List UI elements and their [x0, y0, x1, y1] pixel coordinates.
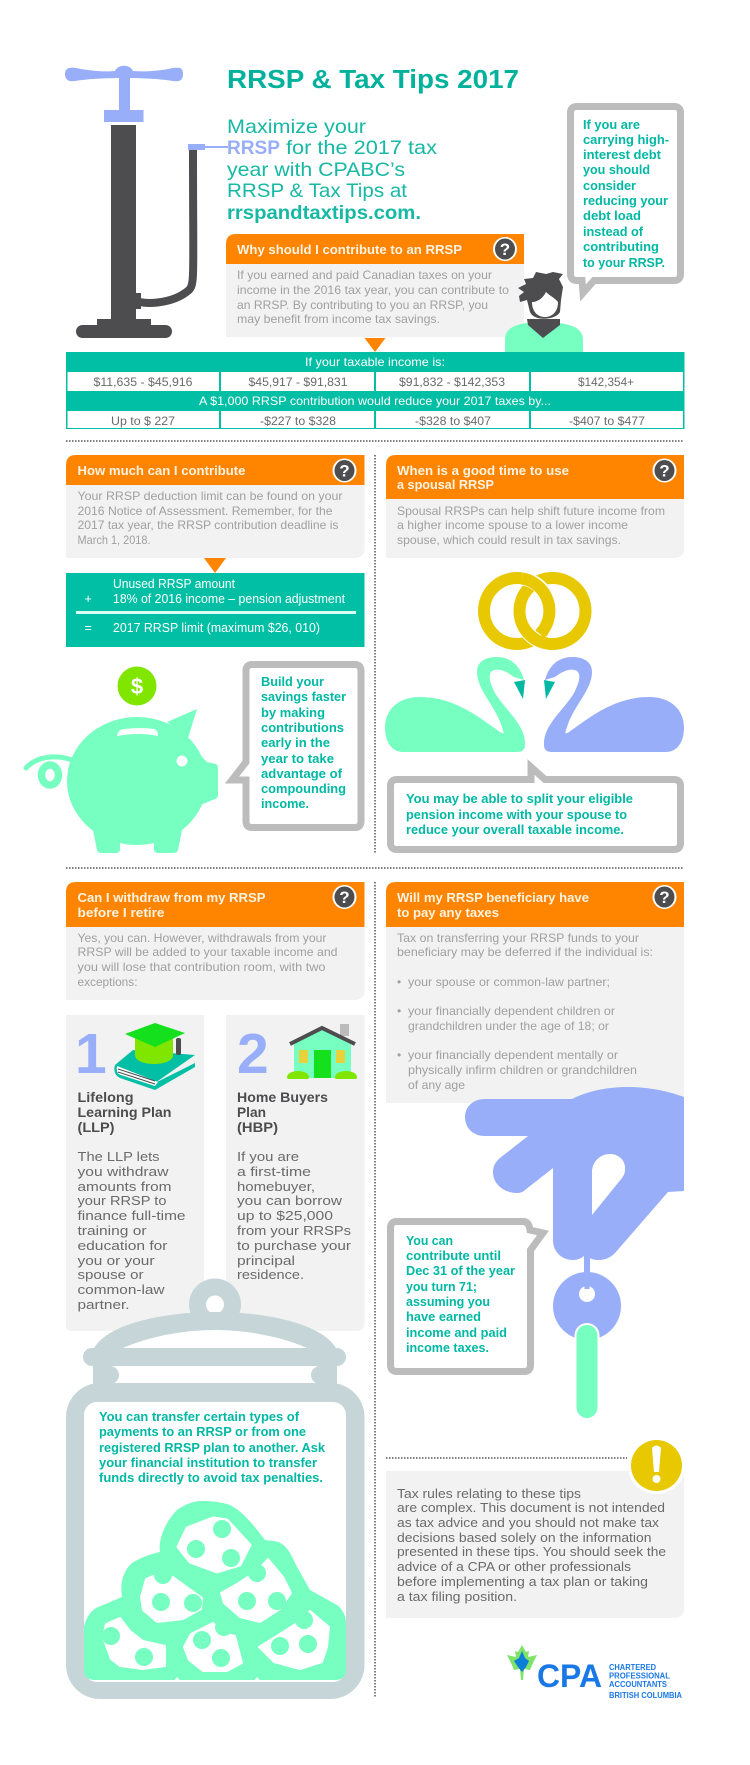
- speech bubble: contribute until: income and paid: [406, 1326, 507, 1340]
- table: income and tax reduction: -$227 to $328: [260, 414, 336, 428]
- panel: disclaimer: as tax advice and you should not make tax: [397, 1516, 660, 1530]
- title: RRSP & Tax Tips 2017: [227, 66, 519, 94]
- text: HBP description: homebuyer,: [237, 1179, 315, 1194]
- speech bubble: build savings: compounding: [261, 782, 346, 796]
- speech bubble: contribute until: [390, 1222, 543, 1372]
- speech bubble: split pension income: You may be able to split your eligible: [406, 792, 633, 806]
- icon: dollar coin: $: [131, 674, 143, 699]
- speech bubble: build savings: advantage of: [261, 767, 343, 781]
- speech bubble: build savings: [232, 664, 361, 828]
- speech bubble: split pension income: reduce your overall taxable income.: [406, 823, 624, 837]
- speech bubble: debt: If you are: [583, 118, 640, 132]
- intro text: Maximize your: [227, 116, 367, 138]
- speech bubble: debt: reducing your: [583, 194, 668, 208]
- text: HBP description: up to $25,000: [237, 1208, 333, 1223]
- speech bubble: debt: you should: [583, 163, 650, 177]
- heading: LLP: [78, 1089, 172, 1135]
- panel: why should I contribute: ?: [500, 240, 510, 259]
- icon: graduation cap on book: [114, 1023, 195, 1090]
- text: LLP description: education for: [78, 1238, 168, 1253]
- heading: LLP: Learning Plan: [78, 1104, 172, 1120]
- panel: beneficiary taxes: physically infirm children or grandchildren: [408, 1063, 637, 1077]
- number 1: 1: [75, 1022, 107, 1086]
- text: LLP description: The LLP lets: [78, 1149, 160, 1164]
- panel: how much can I contribute: ?: [339, 462, 350, 480]
- logo: CPA British Columbia: CHARTERED: [609, 1663, 656, 1672]
- logo: CPA British Columbia: BRITISH COLUMBIA: [609, 1691, 682, 1700]
- text: transfer tip: your financial institution to transfer: [99, 1456, 317, 1470]
- panel: how much can I contribute: March 1, 2018.: [78, 533, 150, 547]
- table: income and tax reduction: Up to $ 227: [111, 414, 175, 428]
- table: income and tax reduction: A $1,000 RRSP contribution would reduce your 2017 taxes by...: [199, 394, 551, 408]
- speech bubble: debt: consider: [583, 179, 636, 193]
- table: income and tax reduction: -$328 to $407: [415, 414, 491, 428]
- speech bubble: build savings: Build your: [261, 675, 324, 689]
- text: LLP description: amounts from: [78, 1179, 172, 1194]
- panel: why should I contribute: an RRSP. By contributing to you an RRSP, you: [237, 298, 488, 312]
- heading: HBP: (HBP): [237, 1119, 278, 1135]
- panel: beneficiary taxes: your financially dependent mentally or: [408, 1048, 618, 1062]
- panel: how much can I contribute: 2016 Notice of Assessment. Remember, for the: [78, 504, 333, 518]
- illustration: cookie jar: [66, 1278, 364, 1699]
- panel: why should I contribute: Why should I contribute to an RRSP: [237, 243, 462, 257]
- panel: spousal RRSP: a spousal RRSP: [397, 478, 494, 492]
- panel: how much can I contribute: How much can I contribute: [78, 464, 246, 478]
- speech bubble: build savings: early in the: [261, 736, 330, 750]
- table: income and tax reduction: $11,635 - $45,916: [94, 375, 193, 389]
- icon: hand holding key: [465, 1087, 684, 1421]
- panel: can I withdraw: before I retire: [78, 906, 165, 920]
- icon: dollar coin: [118, 666, 156, 706]
- text: LLP description: training or: [78, 1223, 147, 1238]
- panel: RRSP limit formula: Unused RRSP amount: [113, 577, 236, 591]
- table: income and tax reduction: $142,354+: [578, 375, 634, 389]
- panel: can I withdraw: ?: [339, 888, 350, 907]
- text: transfer tip: funds directly to avoid tax penalties.: [99, 1471, 323, 1485]
- panel: disclaimer: a tax filing position.: [397, 1590, 517, 1604]
- panel: beneficiary taxes: your spouse or common-law partner;: [408, 975, 610, 989]
- panel: beneficiary taxes: Will my RRSP beneficiary have: [397, 891, 589, 905]
- panel: how much can I contribute: [66, 455, 364, 558]
- panel: beneficiary taxes: •: [397, 1048, 401, 1062]
- panel: can I withdraw: exceptions:: [78, 975, 138, 989]
- heading: LLP: (LLP): [78, 1119, 114, 1135]
- speech bubble: split pension income: pension income with your spouse to: [406, 808, 627, 822]
- panel: can I withdraw: Yes, you can. However, withdrawals from your: [78, 931, 327, 945]
- logo: CPA British Columbia: [507, 1645, 682, 1700]
- intro text: for the 2017 tax: [286, 137, 437, 159]
- panel: spousal RRSP: When is a good time to use: [397, 464, 569, 478]
- text: HBP description: a first-time: [237, 1164, 311, 1179]
- panel: how much can I contribute: 2017 tax year, the RRSP contribution deadline is: [78, 518, 338, 532]
- panel: beneficiary taxes: of any age: [408, 1078, 465, 1092]
- table: income and tax reduction: If your taxable income is:: [305, 355, 445, 369]
- illustration: cookies: [84, 1501, 346, 1682]
- heading: HBP: Home Buyers: [237, 1089, 328, 1105]
- speech bubble: split pension income: [390, 767, 680, 850]
- text: HBP description: If you are: [237, 1149, 299, 1164]
- icon: wedding rings: [484, 578, 586, 644]
- icon: blue swan: [544, 657, 684, 752]
- panel: disclaimer: Tax rules relating to these tips: [397, 1487, 581, 1501]
- panel: beneficiary taxes: •: [397, 975, 401, 989]
- panel: RRSP limit formula: 2017 RRSP limit (maximum $26, 010): [113, 621, 320, 635]
- panel: spousal RRSP: a higher income spouse to a lower income: [397, 518, 628, 532]
- panel: disclaimer: [386, 1471, 684, 1618]
- table: income and tax reduction: $91,832 - $142,353: [399, 375, 505, 389]
- icon: exclamation mark: [628, 1436, 686, 1494]
- intro text: [227, 116, 437, 224]
- speech bubble: debt: interest debt: [583, 148, 662, 162]
- speech bubble: build savings: contributions: [261, 721, 344, 735]
- arrow: to limit formula: [204, 558, 226, 573]
- intro text: RRSP & Tax Tips at: [227, 180, 408, 202]
- text: LLP description: spouse or: [78, 1267, 144, 1282]
- panel: beneficiary taxes: to pay any taxes: [397, 906, 499, 920]
- number 2: 2: [237, 1022, 269, 1086]
- speech bubble: debt: debt load: [583, 209, 641, 223]
- speech bubble: contribute until: income taxes.: [406, 1341, 489, 1355]
- panel: disclaimer: presented in these tips. You should seek the: [397, 1545, 666, 1559]
- icon: bicycle pump: [65, 66, 228, 338]
- logo: CPA British Columbia: CPA: [537, 1658, 602, 1694]
- text: LLP description: you withdraw: [78, 1164, 169, 1179]
- text: LLP description: your RRSP to: [78, 1193, 166, 1208]
- panel: why should I contribute: income in the 2016 tax year, you can contribute to: [237, 283, 509, 297]
- intro text: rrspandtaxtips.com.: [227, 202, 421, 224]
- speech bubble: contribute until: You can: [406, 1234, 453, 1248]
- text: LLP description: finance full-time: [78, 1208, 186, 1223]
- panel: spousal RRSP: Spousal RRSPs can help shift future income from: [397, 504, 665, 518]
- icon: mint swan: [385, 657, 525, 752]
- text: HBP description: to purchase your: [237, 1238, 352, 1253]
- intro text: year with CPABC’s: [227, 159, 405, 181]
- panel: beneficiary taxes: your financially dependent children or: [408, 1004, 615, 1018]
- panel: can I withdraw: RRSP will be added to your taxable income and: [78, 945, 338, 959]
- panel: can I withdraw: you will lose that contribution room, with two: [78, 960, 326, 974]
- table: income and tax reduction: -$407 to $477: [569, 414, 645, 428]
- heading: HBP: [237, 1089, 328, 1135]
- speech bubble: contribute until: have earned: [406, 1310, 481, 1324]
- panel: disclaimer: before implementing a tax plan or taking: [397, 1575, 648, 1589]
- heading: HBP: Plan: [237, 1104, 266, 1120]
- text: LLP description: partner.: [78, 1297, 130, 1312]
- heading: LLP: Lifelong: [78, 1089, 134, 1105]
- speech bubble: build savings: by making: [261, 706, 325, 720]
- text: transfer tip: payments to an RRSP or from one: [99, 1425, 306, 1439]
- text: HBP description: you can borrow: [237, 1193, 343, 1208]
- speech bubble: debt: to your RRSP.: [583, 256, 665, 270]
- speech bubble: contribute until: you turn 71;: [406, 1280, 477, 1294]
- panel: spousal RRSP: spouse, which could result in tax savings.: [397, 533, 621, 547]
- text: transfer tip: registered RRSP plan to another. Ask: [99, 1441, 325, 1455]
- panel: can I withdraw: Can I withdraw from my RRSP: [78, 891, 266, 905]
- speech bubble: contribute until: Dec 31 of the year: [406, 1264, 515, 1278]
- text: HBP description: [237, 1149, 352, 1282]
- arrow: to tax table: [364, 338, 386, 352]
- intro text: RRSP: [227, 137, 280, 159]
- panel: can I withdraw: [66, 882, 364, 1000]
- panel: spousal RRSP: [386, 455, 684, 558]
- icon: house: [280, 1024, 360, 1085]
- icon: person: [505, 272, 583, 352]
- table: income and tax reduction: $45,917 - $91,831: [248, 375, 348, 389]
- speech bubble: build savings: income.: [261, 797, 309, 811]
- panel: lifelong learning plan: [66, 1015, 204, 1331]
- panel: why should I contribute: [226, 234, 524, 337]
- panel: why should I contribute: If you earned and paid Canadian taxes on your: [237, 268, 492, 282]
- speech bubble: contribute until: contribute until: [406, 1249, 501, 1263]
- panel: RRSP limit formula: [66, 573, 364, 647]
- text: HBP description: principal: [237, 1253, 295, 1268]
- text: transfer tip: You can transfer certain types of: [99, 1410, 300, 1424]
- panel: why should I contribute: may benefit from income tax savings.: [237, 312, 440, 326]
- panel: how much can I contribute: Your RRSP deduction limit can be found on your: [78, 489, 343, 503]
- panel: beneficiary taxes: grandchildren under the age of 18; or: [408, 1019, 609, 1033]
- logo: CPA British Columbia: PROFESSIONAL: [609, 1672, 670, 1680]
- text: HBP description: residence.: [237, 1267, 304, 1282]
- panel: home buyers plan: [226, 1015, 364, 1331]
- speech bubble: debt: contributing: [583, 240, 659, 254]
- speech bubble: debt: instead of: [583, 225, 644, 239]
- icon: piggy bank: [26, 709, 218, 853]
- panel: RRSP limit formula: +: [84, 592, 92, 606]
- speech bubble: build savings: year to take: [261, 752, 334, 766]
- speech bubble: contribute until: assuming you: [406, 1295, 490, 1309]
- speech bubble: debt: [570, 106, 680, 293]
- panel: RRSP limit formula: 18% of 2016 income – pension adjustment: [113, 592, 346, 606]
- logo: CPA British Columbia: ACCOUNTANTS: [609, 1680, 668, 1689]
- panel: spousal RRSP: ?: [659, 462, 670, 480]
- icon: maple leaf: [507, 1645, 537, 1680]
- speech bubble: debt: carrying high-: [583, 133, 669, 147]
- text: LLP description: common-law: [78, 1282, 165, 1297]
- panel: beneficiary taxes: beneficiary may be deferred if the individual is:: [397, 945, 653, 959]
- panel: disclaimer: decisions based solely on the information: [397, 1531, 652, 1545]
- panel: beneficiary taxes: •: [397, 1004, 401, 1018]
- panel: beneficiary taxes: Tax on transferring your RRSP funds to your: [397, 931, 639, 945]
- text: LLP description: you or your: [78, 1253, 155, 1268]
- speech bubble: build savings: savings faster: [261, 690, 346, 704]
- panel: beneficiary taxes: ?: [659, 888, 670, 907]
- panel: disclaimer: are complex. This document is not intended: [397, 1501, 665, 1515]
- panel: disclaimer: advice of a CPA or other professionals: [397, 1560, 631, 1574]
- text: transfer tip: [99, 1410, 325, 1485]
- panel: beneficiary taxes: [386, 882, 684, 1103]
- text: HBP description: from your RRSPs: [237, 1223, 352, 1238]
- panel: RRSP limit formula: =: [84, 621, 92, 635]
- table: income and tax reduction: [66, 352, 684, 429]
- text: LLP description: [78, 1149, 186, 1312]
